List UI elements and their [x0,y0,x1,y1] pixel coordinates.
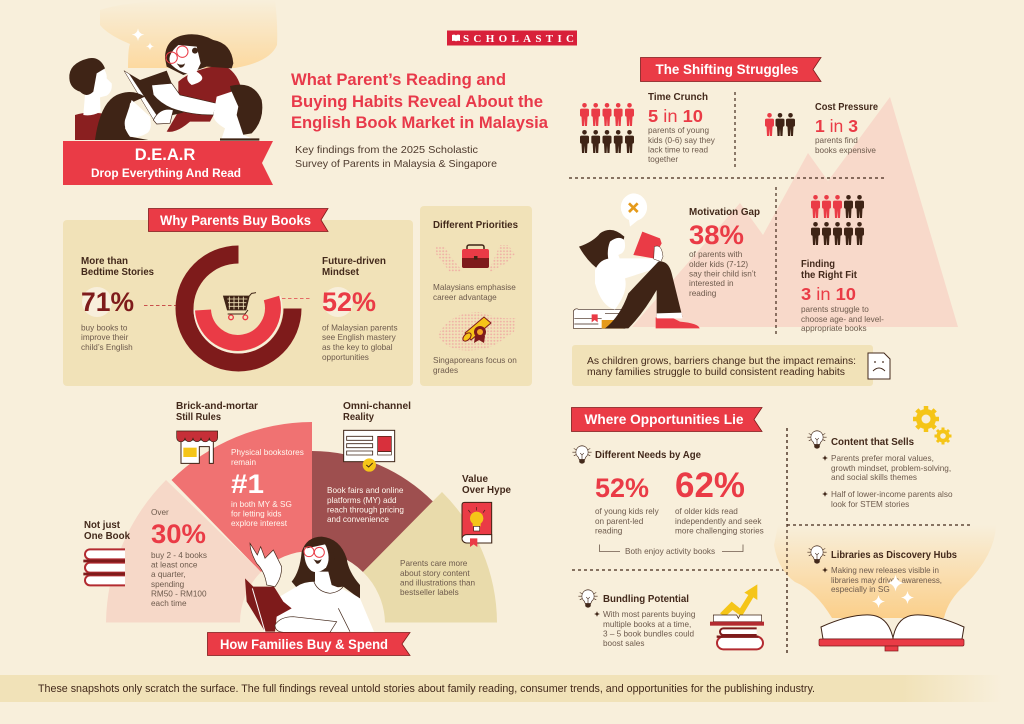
map: Malaysia with briefcase [436,245,515,272]
title: English Book Market in Malaysia [291,114,549,132]
panel: different priorities [420,206,532,386]
block: finding the right fit [801,195,884,333]
icon: light bulb [807,546,827,564]
shoes [656,317,700,328]
stat: 52%: Mindset [322,267,360,278]
block: different needs by age: on parent-led [595,517,644,526]
block: motivation gap: say their child isn’t [689,270,757,278]
text: value over hype [400,474,512,597]
icon: light bulb [578,590,598,608]
title: Buying Habits Reveal About the [291,93,543,111]
block: bundling potential: With most parents buying [603,610,696,619]
text: value over hype: Over Hype [462,485,512,496]
text: omni-channel: Book fairs and online [327,486,404,495]
illustration: woman reading aloud [245,537,374,632]
block: time crunch: Time Crunch [648,92,708,103]
stat: 71%: Bedtime Stories [81,267,155,278]
icon: people 3 in 10 [811,195,864,245]
text: brick-and-mortar: in both MY & SG [231,500,292,509]
glow: libraries [774,525,996,618]
red book [633,232,662,258]
ribbon: the shifting struggles [640,58,821,82]
icon: online store page [344,430,395,472]
icon: people 1 in 3 [765,113,795,136]
block: motivation gap: interested in [689,279,734,288]
centre child [95,92,173,140]
text: omni-channel [327,401,411,524]
text: omni-channel: and convenience [327,515,389,524]
panel: different priorities: career advantage [433,293,497,302]
ribbon: where opportunities lie [572,408,762,432]
body [595,258,662,309]
stat: 71%: improve their [81,333,129,342]
icon: open book [819,615,964,651]
icon: book with light bulb [462,502,492,547]
stat: 52%: 52% [322,287,376,317]
panel: why parents buy books [63,208,413,386]
block: time crunch: lack time to read [648,146,709,154]
hair [579,230,624,272]
ribbon: why parents buy books: Why Parents Buy Books [160,213,311,228]
ribbon: where opportunities lie: Where Opportunities Lie [584,412,744,427]
block: cost pressure: 1 in 3 [815,116,858,136]
background mountains [632,97,958,327]
block: different needs by age: of older kids read [675,507,738,516]
icon: gears [913,406,952,444]
text: not just one book: each time [151,599,187,608]
right child [213,85,262,141]
block: different needs by age: 52% [595,473,649,503]
icon: sad document [868,353,890,379]
text: not just one book: Over [151,508,169,517]
stat: 71% [81,256,155,352]
stat: 52%: opportunities [322,353,369,362]
illustration: parent reading to three children [69,28,262,141]
block: different needs by age: reading [595,526,623,536]
ribbon: how families buy and spend [208,632,410,656]
stat: 71%: 71% [81,287,134,317]
stat: 71%: buy books to [81,324,128,332]
text: not just one book: 30% [151,519,206,549]
block: content that sells [807,406,953,509]
block: content that sells: look for STEM stories [831,500,909,509]
block: motivation gap: Motivation Gap [689,207,760,218]
stat: 52%: as the key to global [322,343,393,352]
block: time crunch [580,92,716,164]
sector: brick-and-mortar [172,422,312,572]
block: cost pressure: parents find [815,136,858,145]
text: brick-and-mortar: remain [231,458,256,467]
ribbon: D.E.A.R [63,141,273,185]
subtitle: Key findings from the 2025 Scholastic [295,145,478,156]
text: omni-channel: Omni-channel [343,401,411,412]
logo: Scholastic [447,30,577,46]
block: libraries as discovery hubs: Libraries as Discovery Hubs [831,550,958,561]
text: brick-and-mortar: Physical bookstores [231,448,304,457]
sparkles [872,574,914,608]
text: value over hype: Value [462,474,489,485]
ribbon: why parents buy books [148,208,328,232]
callout: barriers change: As children grows, barriers change but the impact remains: [587,356,856,367]
block: motivation gap: 38% [689,220,744,250]
block: cost pressure: books expensive [815,146,876,155]
text: brick-and-mortar: explore interest [231,519,288,528]
ribbon: D.E.A.R: Drop Everything And Read [91,168,241,180]
ribbon: how families buy and spend: How Families Buy & Spend [220,637,388,652]
text: not just one book: RM50 - RM100 [151,590,207,598]
sector: omni-channel [312,451,434,572]
block: different needs by age: Different Needs by Age [595,450,702,461]
text: not just one book: spending [151,580,185,589]
block: content that sells: and social skills themes [831,473,917,482]
footer band: These snapshots only scratch the surface. The full findings reveal untold stories about family reading, consumer trends, and opportunities for the publishing industry. [38,683,815,695]
block: content that sells: Half of lower-income parents also [831,490,953,499]
block: time crunch: kids (0-6) say they [648,136,716,145]
block: cost pressure [765,102,879,155]
block: motivation gap: older kids (7-12) [689,260,748,269]
icon: light bulb [572,446,592,464]
title: What Parent’s Reading and [291,71,506,89]
block: content that sells: growth mindset, problem-solving, [831,464,951,473]
left child [69,58,112,140]
block: bundling potential [578,590,696,648]
block: time crunch: together [648,155,678,164]
block: finding the right fit: appropriate books [801,324,867,333]
block: finding the right fit: choose age- and level- [801,315,884,324]
panel: different priorities: Different Priorities [433,220,519,231]
text: not just one book: Not just [84,520,121,531]
block: different needs by age: Both enjoy activity books [625,547,715,556]
block: different needs by age: of young kids rely [595,507,660,516]
stat: 52%: Future-driven [322,256,386,267]
text: omni-channel: reach through pricing [327,506,404,514]
block: time crunch: parents of young [648,126,709,135]
block: motivation gap: reading [689,289,717,298]
panel: different priorities: grades [433,366,458,375]
text: not just one book: a quarter, [151,570,186,579]
panel: different priorities: Malaysians emphasise [433,283,516,292]
icon: light bulb [807,431,827,449]
stat: 71%: More than [81,256,128,267]
sector: not just one book [106,480,261,622]
subtitle: Survey of Parents in Malaysia & Singapore [295,159,497,170]
face [608,238,625,259]
icon: people 5 in 10 [580,103,634,153]
block: content that sells: Parents prefer moral values, [831,454,934,463]
block: different needs by age: independently and seek [675,517,762,526]
text: brick-and-mortar: #1 [231,469,264,499]
panel: different priorities: Singaporeans focus on [433,356,517,365]
block: content that sells: Content that Sells [831,437,915,448]
callout: barriers change: many families struggle to build consistent reading habits [587,367,845,378]
block: cost pressure: Cost Pressure [815,102,879,113]
block: libraries as discovery hubs: Making new releases visible in [831,566,939,575]
ribbon: D.E.A.R: D.E.A.R [135,146,195,164]
text: brick-and-mortar: Brick-and-mortar [176,401,258,412]
block: time crunch: 5 in 10 [648,106,703,126]
donut chart [176,246,302,372]
block: libraries as discovery hubs: especially in SG [831,585,890,594]
logo: Scholastic: SCHOLASTIC [463,33,574,45]
stat: 52%: see English mastery [322,333,397,342]
text: value over hype: and illustrations than [400,578,476,588]
callout: barriers change [572,345,873,386]
subtitle [295,145,497,170]
illustration: girl sitting on books [573,193,700,328]
footer band [0,675,1002,702]
block: bundling potential: 3 – 5 book bundles could [603,630,694,638]
text: value over hype: about story content [400,569,470,578]
title [291,71,549,132]
text: value over hype: bestseller labels [400,588,459,597]
block: finding the right fit: Finding [801,259,835,270]
block: different needs by age [572,446,764,556]
block: motivation gap: of parents with [689,250,743,259]
text: value over hype: Parents care more [400,559,468,568]
block: bundling potential: Bundling Potential [603,594,689,605]
stat: 52%: of Malaysian parents [322,324,398,332]
block: different needs by age: more challenging stories [675,526,764,536]
text: brick-and-mortar: for letting kids [231,510,282,518]
sector: value over hype [363,492,497,622]
icon: book pile with rising arrow [710,584,764,649]
book pile [573,309,627,328]
stat: 52% [322,256,398,362]
block: different needs by age: 62% [675,466,745,505]
text: brick-and-mortar [176,401,304,528]
block: bundling potential: multiple books at a time, [603,620,691,629]
book [124,71,183,119]
text: omni-channel: platforms (MY) add [327,496,397,505]
block: libraries as discovery hubs [807,546,958,594]
icon: shopping cart [223,293,256,320]
speech bubble [621,193,647,227]
text: omni-channel: Reality [343,412,375,423]
block: finding the right fit: 3 in 10 [801,284,856,304]
header glow behind illustration [100,0,277,68]
block: bundling potential: boost sales [603,639,644,648]
block: finding the right fit: parents struggle to [801,305,869,314]
mother's arm [152,83,217,115]
map: Singapore with scroll [438,312,516,350]
text: not just one book [84,508,207,608]
mother [165,34,241,132]
icon: store [177,431,218,463]
text: not just one book: buy 2 - 4 books [151,551,207,560]
block: libraries as discovery hubs: libraries may drives awareness, [831,576,942,585]
stat: 71%: child’s English [81,343,133,352]
ribbon: the shifting struggles: The Shifting Struggles [656,62,799,77]
text: brick-and-mortar: Still Rules [176,412,222,423]
icon: stack of books [83,549,125,585]
sparkles [132,28,154,50]
text: not just one book: at least once [151,560,198,570]
block: motivation gap [689,207,760,298]
chart: how families buy and spend fan [83,401,512,656]
text: not just one book: One Book [84,531,131,542]
block: finding the right fit: the Right Fit [801,270,858,281]
